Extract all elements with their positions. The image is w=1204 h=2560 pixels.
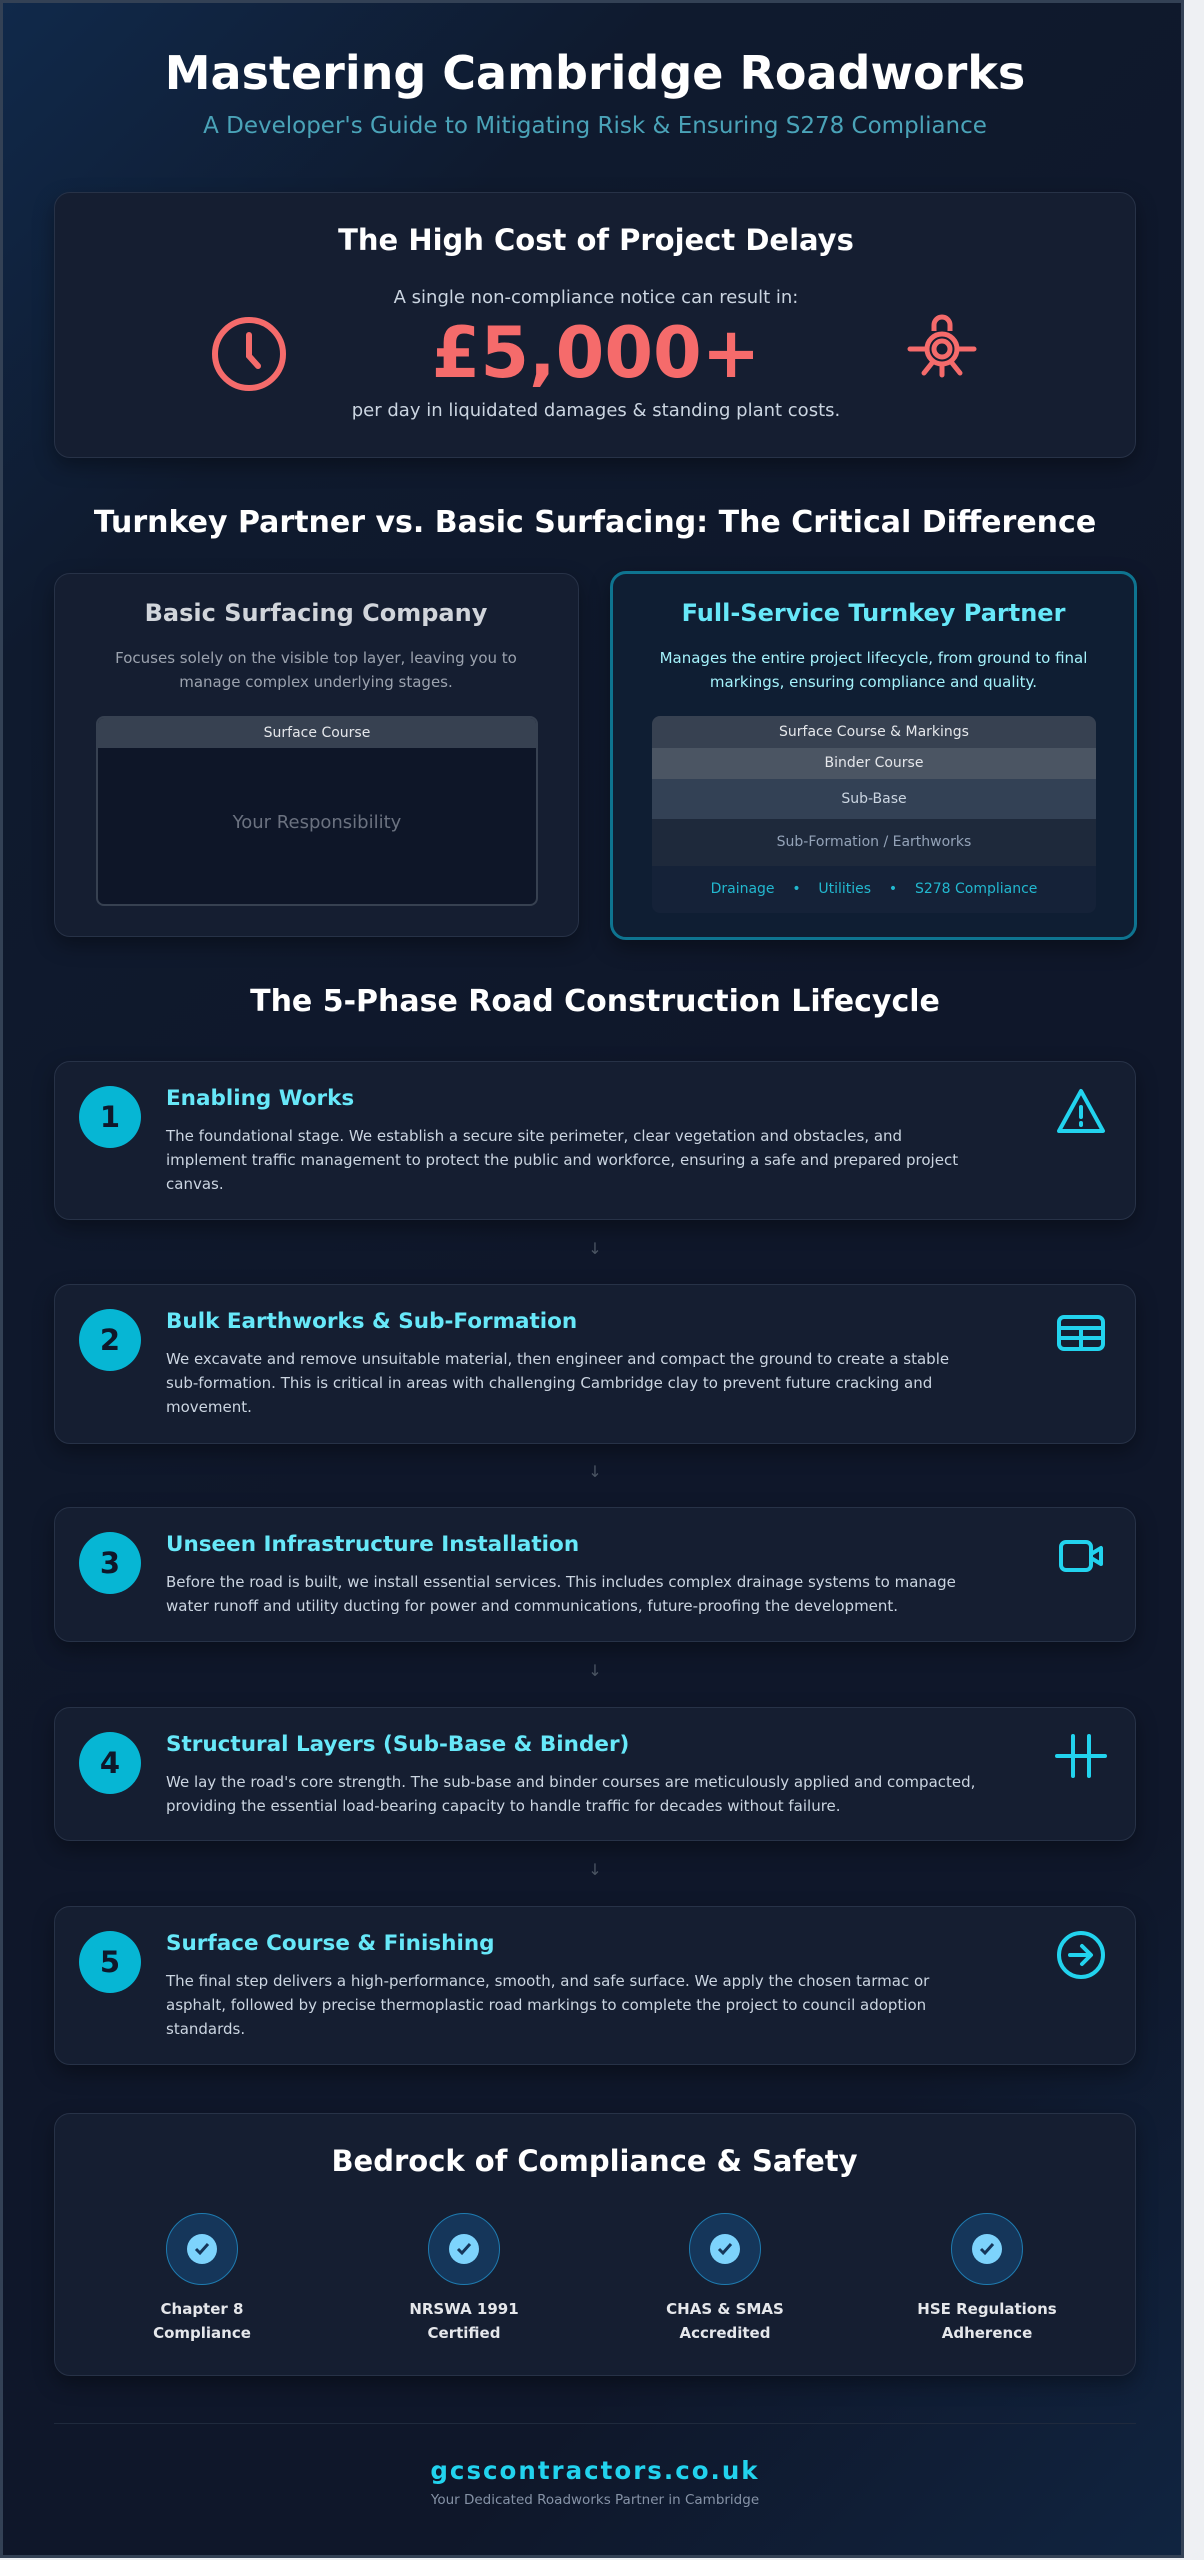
- panel: basic surfacing: [54, 573, 579, 937]
- phase 4 card: Structural Layers (Sub-Base & Binder): [166, 1732, 629, 1757]
- phase 2 card: 2: [100, 1323, 120, 1357]
- phase 2 card: We excavate and remove unsuitable material, then engineer and compact the ground to create a stable sub‑formation. This is critical in areas with challenging Cambridge clay to prevent future cracking and movement.: [166, 1350, 949, 1416]
- footer url: gcscontractors.co.uk: [430, 2456, 760, 2485]
- badge: chapter 8: Chapter 8: [161, 2300, 243, 2318]
- heading: Bedrock of Compliance & Safety: [331, 2144, 858, 2178]
- badge: nrswa: [409, 2213, 519, 2342]
- panel: cost of delays: [54, 192, 1136, 458]
- subtitle: A Developer's Guide to Mitigating Risk & Ensuring S278 Compliance: [203, 113, 987, 139]
- badge: chapter 8: [153, 2213, 251, 2342]
- arrow: ↓: [588, 1661, 602, 1680]
- heading: Full-Service Turnkey Partner: [682, 599, 1065, 627]
- heading: The High Cost of Project Delays: [338, 223, 854, 257]
- badge: chas: [666, 2213, 784, 2342]
- text outro: per day in liquidated damages & standing plant costs.: [352, 400, 840, 421]
- layer stack: Sub-Base: [841, 791, 907, 807]
- badge: hse: [917, 2213, 1057, 2342]
- phase 4 card: We lay the road's core strength. The sub-base and binder courses are meticulously applied and compacted, providing the essential load-bearing capacity to handle traffic for decades without failure.: [166, 1773, 975, 1815]
- layer stack: Surface Course: [264, 725, 370, 741]
- badge: nrswa: NRSWA 1991: [409, 2300, 519, 2318]
- badge: nrswa: Certified: [428, 2324, 500, 2342]
- panel: turnkey partner: [610, 571, 1137, 940]
- layer stack: Your Responsibility: [233, 812, 401, 833]
- badge: hse: HSE Regulations: [917, 2300, 1057, 2318]
- phase 4 card: 4: [100, 1746, 120, 1780]
- phase 4 card: [54, 1707, 1136, 1841]
- description: Focuses solely on the visible top layer, leaving you to manage complex underlying stages.: [115, 649, 517, 691]
- text intro: A single non-compliance notice can result in:: [394, 287, 798, 308]
- phase 3 card: Unseen Infrastructure Installation: [166, 1532, 579, 1557]
- phase 1 card: Enabling Works: [166, 1086, 354, 1111]
- phase 1 card: The foundational stage. We establish a secure site perimeter, clear vegetation and obstacles, and implement traffic management to protect the public and workforce, ensuring a safe and prepared project canvas.: [166, 1127, 958, 1193]
- heading: comparison: Turnkey Partner vs. Basic Surfacing: The Critical Difference: [94, 505, 1096, 540]
- panel: compliance: [54, 2113, 1136, 2376]
- description: Manages the entire project lifecycle, from ground to final markings, ensuring compliance and quality.: [660, 649, 1087, 691]
- footer tagline: Your Dedicated Roadworks Partner in Cambridge: [431, 2492, 759, 2508]
- phase 3 card: 3: [100, 1546, 120, 1580]
- layer stack: Drainage • Utilities • S278 Compliance: [711, 881, 1037, 897]
- phase 5 card: 5: [100, 1945, 120, 1979]
- phase 2 card: [54, 1284, 1136, 1444]
- icon: layers table: [1057, 1315, 1105, 1351]
- icon: warning light: [908, 314, 976, 378]
- icon: clock: [212, 317, 286, 391]
- arrow: ↓: [588, 1239, 602, 1258]
- arrow: ↓: [588, 1462, 602, 1481]
- big number: £5,000+: [432, 312, 760, 394]
- phase 3 card: [54, 1507, 1136, 1642]
- icon: camera/duct: [1059, 1540, 1103, 1572]
- badge: chas: CHAS & SMAS: [666, 2300, 784, 2318]
- phase 3 card: Before the road is built, we install essential services. This includes complex drainage systems to manage water runoff and utility ducting for power and communications, future-proofing the development.: [166, 1573, 956, 1615]
- layer stack: Sub-Formation / Earthworks: [777, 834, 971, 850]
- heading: lifecycle: The 5-Phase Road Construction Lifecycle: [250, 984, 940, 1019]
- icon: arrow circle: [1057, 1931, 1105, 1979]
- layer stack: Binder Course: [825, 755, 923, 771]
- heading: Basic Surfacing Company: [145, 599, 487, 627]
- layer stack: [96, 716, 538, 906]
- icon: grid: [1055, 1734, 1107, 1778]
- badge: chas: Accredited: [680, 2324, 770, 2342]
- phase 1 card: 1: [100, 1100, 120, 1134]
- phase 1 card: [54, 1061, 1136, 1220]
- icon: warning: [1057, 1088, 1106, 1133]
- layer stack: Surface Course & Markings: [779, 724, 969, 740]
- phase 5 card: Surface Course & Finishing: [166, 1931, 495, 1956]
- arrow: ↓: [588, 1860, 602, 1879]
- phase 5 card: The final step delivers a high-performance, smooth, and safe surface. We apply the chosen tarmac or asphalt, followed by precise thermoplastic road markings to complete the project to council adoption standards.: [166, 1972, 929, 2038]
- phase 2 card: Bulk Earthworks & Sub-Formation: [166, 1309, 577, 1334]
- title: Mastering Cambridge Roadworks: [165, 46, 1025, 100]
- phase 5 card: [54, 1906, 1136, 2065]
- badge: hse: Adherence: [942, 2324, 1032, 2342]
- layer stack: [652, 716, 1096, 897]
- badge: chapter 8: Compliance: [153, 2324, 251, 2342]
